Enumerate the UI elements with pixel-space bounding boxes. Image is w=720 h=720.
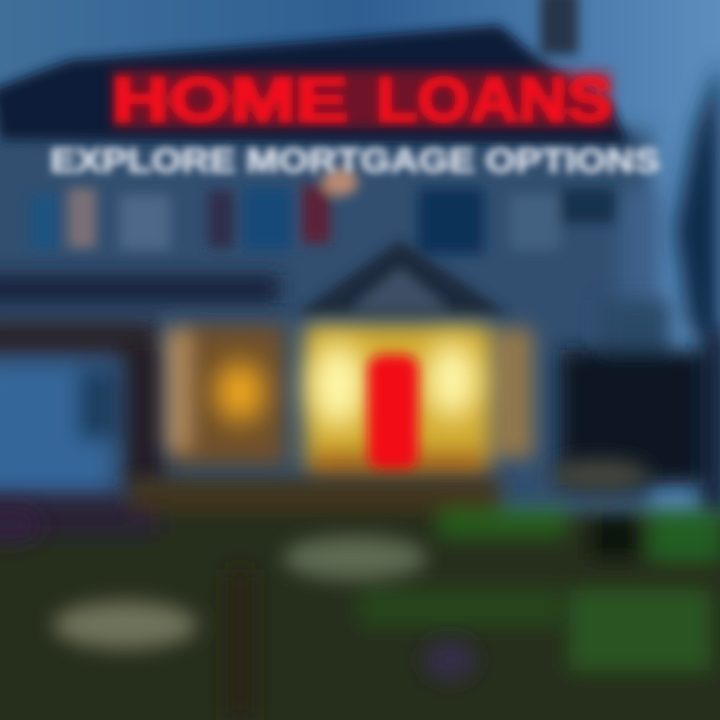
subtitle: EXPLORE MORTGAGE OPTIONS bbox=[50, 142, 660, 180]
red door bbox=[368, 355, 418, 470]
porch lights bbox=[165, 325, 533, 480]
pale shrubs bbox=[0, 507, 476, 720]
roof bbox=[0, 0, 630, 145]
garden bbox=[0, 459, 720, 720]
title: HOME bbox=[112, 66, 348, 135]
porch gable bbox=[295, 240, 510, 315]
house facade bbox=[0, 130, 660, 510]
title bbox=[112, 66, 612, 135]
upper windows bbox=[30, 168, 615, 254]
window glow highlights bbox=[216, 342, 478, 427]
title: LOANS bbox=[376, 66, 612, 135]
sky bbox=[0, 0, 720, 540]
right dark tree and far background bbox=[560, 60, 720, 520]
lower left wall and porch beam bbox=[0, 275, 280, 495]
